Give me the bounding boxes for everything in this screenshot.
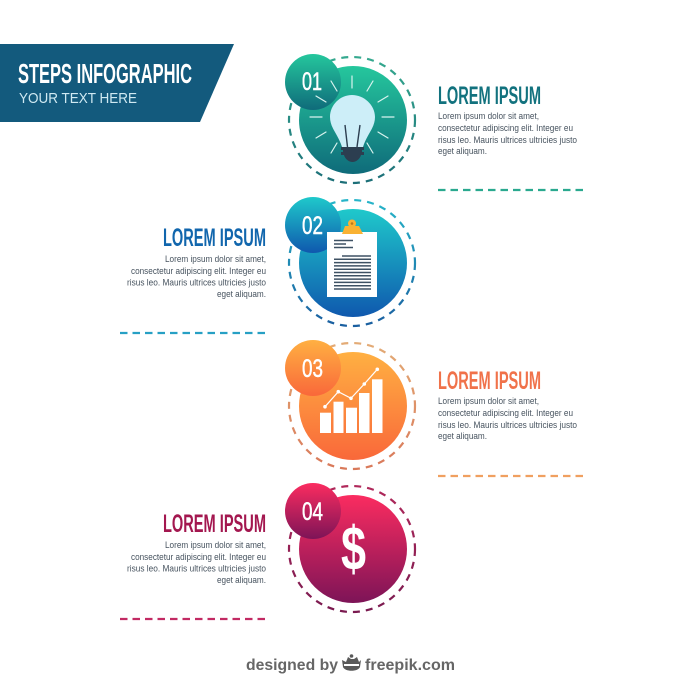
footer credit: designed by [246,657,338,674]
step 02 text block [120,224,267,333]
step 04 text block: consectetur adipiscing elit. Integer eu [131,552,266,562]
step 03 circle: 03 [302,355,323,383]
step 04 text block: risus leo. Mauris ultrices ultricies justo [127,564,266,574]
icon: clipboard [327,220,377,297]
step 02 circle: 02 [302,212,323,240]
footer credit [246,654,455,674]
step 02 text block: consectetur adipiscing elit. Integer eu [131,266,266,276]
step 04 text block: LOREM IPSUM [163,510,266,538]
title banner [0,44,234,122]
icon: dollar sign: $ [341,515,366,584]
step 01 circle: 01 [302,68,322,96]
step 03 text block: Lorem ipsum dolor sit amet, [438,396,539,406]
step 03 text block [438,367,585,476]
step 02 text block: eget aliquam. [217,289,266,299]
step 01 text block: LOREM IPSUM [438,82,541,110]
step 01 text block: risus leo. Mauris ultrices ultricies justo [438,135,577,145]
step 02 circle [285,197,415,326]
icon: light bulb [310,76,394,162]
step 04 text block [120,510,267,619]
step 04 text block: Lorem ipsum dolor sit amet, [165,540,266,550]
footer credit: freepik.com [365,657,455,674]
step 03 text block: risus leo. Mauris ultrices ultricies justo [438,420,577,430]
step 02 text block: risus leo. Mauris ultrices ultricies justo [127,278,266,288]
step 01 text block: consectetur adipiscing elit. Integer eu [438,123,573,133]
icon: bar chart [320,368,382,433]
title banner: STEPS INFOGRAPHIC [18,58,192,89]
step 01 text block: eget aliquam. [438,146,487,156]
step 03 text block: eget aliquam. [438,431,487,441]
step 01 circle [285,54,415,183]
icon: freepik crown [342,654,361,671]
step 01 text block: Lorem ipsum dolor sit amet, [438,111,539,121]
step 02 text block: Lorem ipsum dolor sit amet, [165,254,266,264]
step 02 text block: LOREM IPSUM [163,224,266,252]
step 03 text block: consectetur adipiscing elit. Integer eu [438,408,573,418]
step 04 circle [285,483,415,612]
step 01 text block [438,82,585,190]
step 03 text block: LOREM IPSUM [438,367,541,395]
step 04 text block: eget aliquam. [217,575,266,585]
step 03 circle [285,340,415,469]
step 04 circle: 04 [302,498,323,526]
title banner: YOUR TEXT HERE [19,90,137,107]
